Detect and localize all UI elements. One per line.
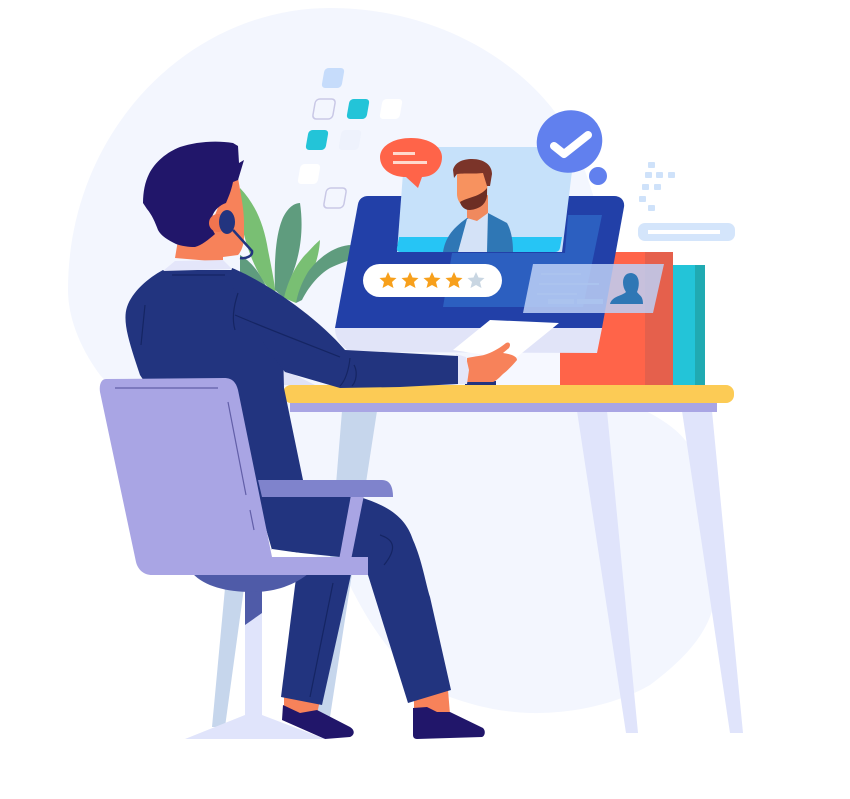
- near ankle: [414, 690, 450, 714]
- hair: [143, 142, 244, 247]
- desk far legs: [317, 411, 743, 733]
- dots cluster: [639, 162, 675, 211]
- floating squares: [297, 68, 403, 208]
- desk object under hand: [465, 381, 496, 385]
- video call panel: [397, 147, 575, 252]
- stars: [380, 272, 484, 288]
- cuff: [456, 354, 469, 384]
- rear leg: [212, 588, 244, 727]
- far leg: [281, 570, 352, 705]
- torso: [125, 270, 303, 500]
- check badge: [528, 101, 611, 185]
- arm post: [339, 495, 364, 560]
- chair seam lines: [115, 388, 254, 530]
- speech bubble: [380, 138, 442, 188]
- monitor: [335, 196, 624, 353]
- floating search bar: [638, 223, 735, 241]
- background blob: [68, 8, 716, 713]
- hand: [467, 342, 517, 382]
- shirt collar: [163, 260, 232, 271]
- ear: [209, 214, 227, 232]
- headset: [219, 210, 252, 258]
- far ankle: [284, 695, 320, 716]
- base: [185, 715, 325, 739]
- jacket creases: [141, 275, 393, 697]
- arm: [231, 268, 458, 388]
- post shadow: [245, 588, 262, 625]
- near leg: [255, 490, 451, 703]
- person: [125, 142, 517, 739]
- far shoe: [282, 705, 354, 739]
- near shoe: [413, 707, 485, 739]
- plant: [240, 188, 352, 303]
- seat underside: [193, 574, 308, 592]
- seat and back: [100, 378, 368, 575]
- rating pill: [363, 264, 502, 297]
- document in hand: [453, 320, 559, 358]
- monitor base sliver: [275, 365, 315, 385]
- books: [560, 252, 705, 385]
- seat highlight: [272, 549, 300, 557]
- armrest: [258, 480, 393, 497]
- profile card: [523, 264, 664, 313]
- remote agent: [443, 159, 513, 252]
- post: [245, 590, 262, 718]
- neck and face: [175, 170, 244, 262]
- desk top: [283, 385, 734, 412]
- monitor stand: [470, 353, 560, 385]
- chair: [100, 378, 393, 739]
